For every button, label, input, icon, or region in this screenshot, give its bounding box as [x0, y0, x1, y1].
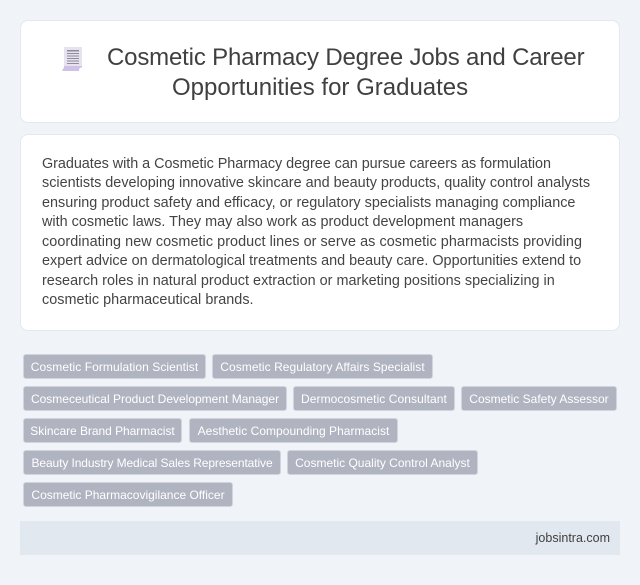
tag list: job titles: Cosmetic Regulatory Affairs Specialist	[220, 360, 425, 374]
text block: description: expert advice on dermatological treatments and beauty care. Opportunities extend to	[42, 253, 581, 269]
text block: description: ensuring product safety and efficacy, or regulatory specialists managing compliance	[42, 195, 575, 211]
text block: description: research roles in natural product extraction or marketing positions specializing in	[42, 273, 555, 289]
tag list: job titles: Cosmetic Formulation Scientist	[31, 360, 198, 374]
text block: description: with cosmetic laws. They may also work as product development managers	[42, 214, 523, 230]
title	[107, 44, 584, 101]
text block: description	[42, 156, 590, 308]
icon: document scroll	[62, 47, 82, 71]
tag list: job titles: Beauty Industry Medical Sales Representative	[31, 456, 273, 470]
tag list: job titles: Cosmeceutical Product Development Manager	[31, 392, 279, 406]
footer	[20, 521, 620, 555]
panel: description	[20, 134, 620, 331]
tag list: job titles: Skincare Brand Pharmacist	[30, 424, 175, 438]
tag list: job titles: Cosmetic Quality Control Analyst	[295, 456, 470, 470]
text block: description: scientists developing innovative skincare and beauty products, quality control analysts	[42, 175, 590, 191]
tag list: job titles: Dermocosmetic Consultant	[301, 392, 447, 406]
tag list: job titles: Aesthetic Compounding Pharmacist	[198, 424, 389, 438]
text block: description: cosmetic pharmaceutical brands.	[42, 292, 254, 308]
text block: description: coordinating new cosmetic product lines or serve as cosmetic pharmacists providing	[42, 234, 582, 250]
title: Opportunities for Graduates	[172, 74, 468, 101]
panel: title card	[20, 20, 620, 123]
title: Cosmetic Pharmacy Degree Jobs and Career	[107, 44, 584, 71]
tag list: job titles	[23, 354, 617, 507]
text block: description: Graduates with a Cosmetic Pharmacy degree can pursue careers as formulation	[42, 156, 551, 172]
footer source text: jobsintra.com	[536, 531, 610, 545]
tag list: job titles: Cosmetic Pharmacovigilance Officer	[31, 488, 225, 502]
tag list: job titles: Cosmetic Safety Assessor	[469, 392, 609, 406]
